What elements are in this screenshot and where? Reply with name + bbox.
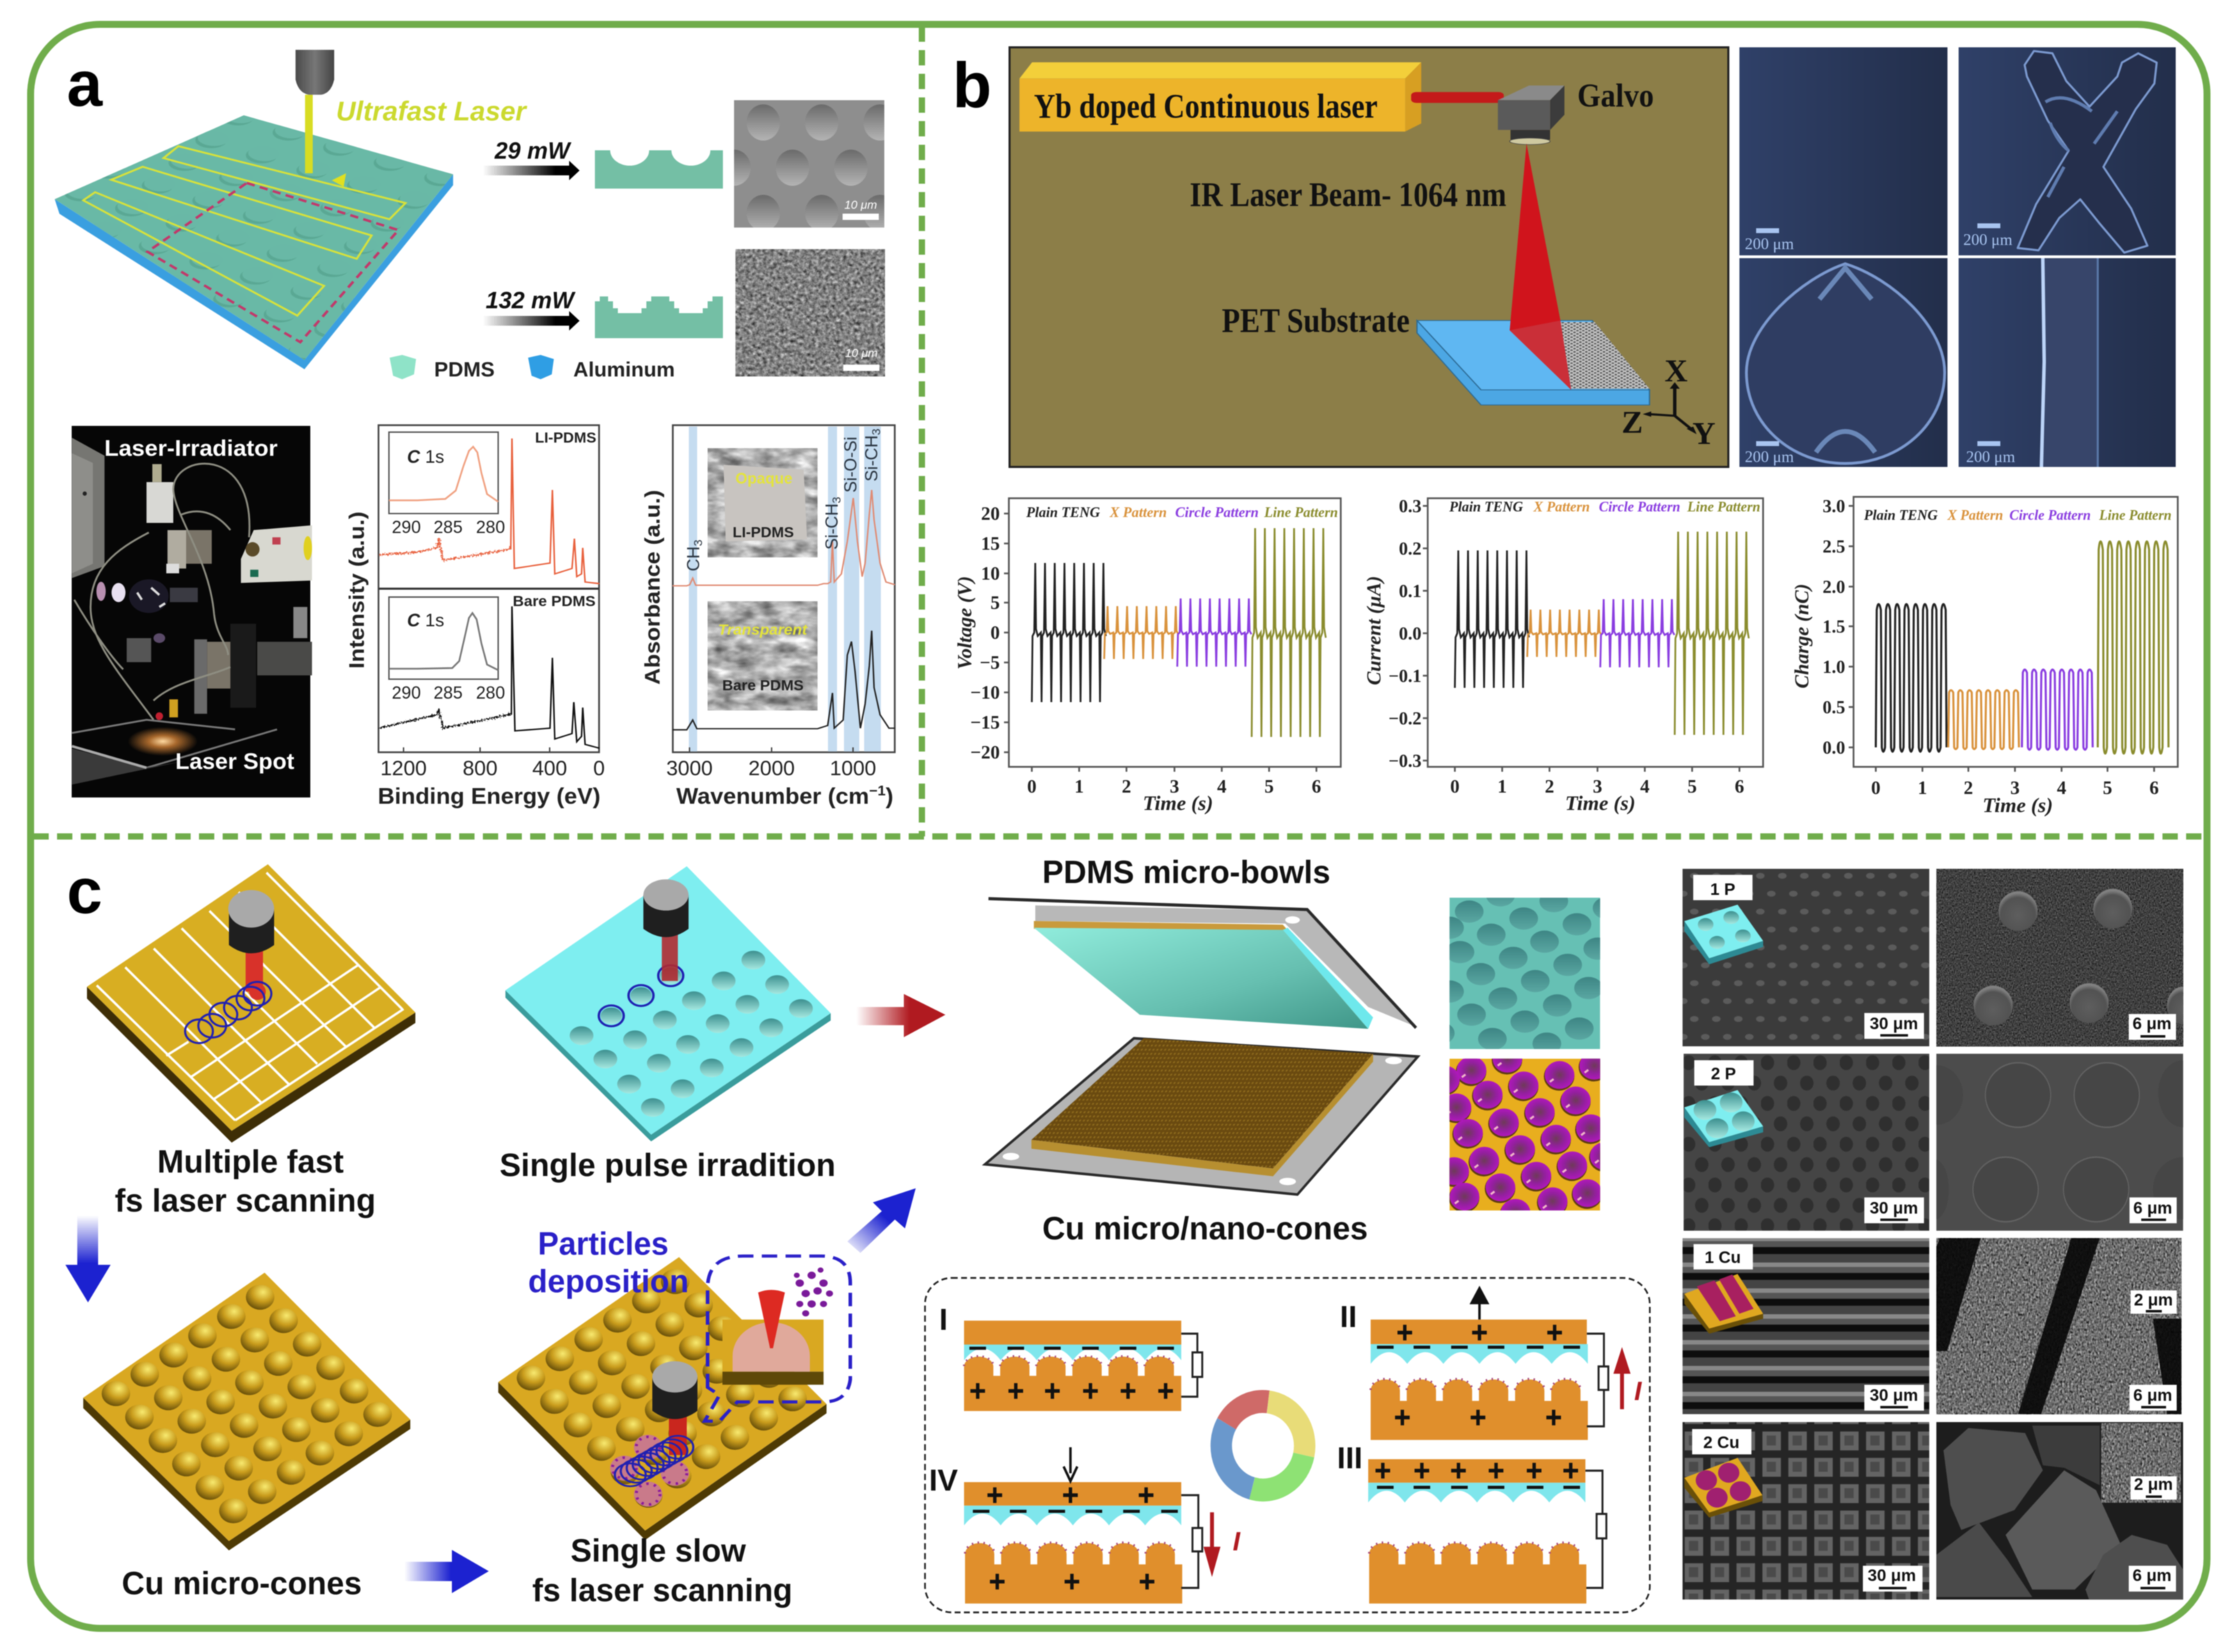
peak labels: CH	[684, 546, 703, 571]
SEM line pattern: 200 μm	[1966, 448, 2015, 466]
center device and mechanism	[925, 898, 1650, 1612]
stage labels: II	[1340, 1300, 1357, 1334]
charge axis titles: Time (s)	[1982, 794, 2053, 817]
SEM image 132 mW	[735, 249, 885, 376]
SEM line pattern	[1959, 258, 2176, 467]
setup labels	[1034, 77, 1716, 451]
current labels: I	[1233, 1527, 1241, 1557]
caption: Cu micro-cones: Cu micro-cones	[122, 1565, 362, 1601]
SEM image 29 mW: 10 μm	[844, 198, 877, 212]
current legend: X Pattern	[1533, 498, 1590, 515]
voltage y ticks: −15	[971, 712, 1000, 733]
SEM scale labels: 2 μm	[2134, 1475, 2173, 1494]
charge x ticks	[1871, 777, 2159, 798]
red laser beam	[1510, 143, 1571, 390]
setup labels: Z	[1622, 404, 1643, 440]
inset tick labels: 280	[476, 683, 505, 703]
chart: voltage: Voltage (V)	[954, 576, 976, 669]
charge x ticks: 5	[2103, 777, 2112, 798]
caption: single pulse: Single pulse irradition	[500, 1147, 836, 1183]
charge y ticks: 1.5	[1823, 617, 1845, 637]
SEM white label boxes	[1692, 875, 2176, 1591]
bare PDMS spectrum	[379, 709, 511, 728]
chart: XPS spectra: C 1s	[407, 610, 444, 630]
laser objective	[296, 50, 334, 95]
setup labels: Galvo	[1577, 77, 1654, 114]
current legend	[1449, 498, 1760, 515]
SEM scale labels: 30 μm	[1870, 1386, 1918, 1405]
yellow scan path	[83, 146, 406, 316]
charge x ticks: 6	[2149, 777, 2159, 798]
image: Cu cones	[1449, 1058, 1601, 1212]
SEM plain	[1739, 47, 1947, 255]
chart: charge: Charge (nC)	[1791, 584, 1813, 688]
setup labels: X	[1664, 353, 1688, 388]
yellow direction arrow	[332, 173, 346, 186]
SEM 2Cu	[1682, 1422, 2183, 1600]
stage labels	[929, 1300, 1362, 1498]
plate: Cu micro-cones	[83, 1273, 411, 1550]
setup labels: Yb doped Continuous laser	[1034, 86, 1378, 125]
magnified inset	[705, 1256, 850, 1421]
x axis title: Binding Energy (eV)	[378, 784, 600, 809]
SEM tags: 1 P	[1710, 880, 1735, 899]
SEM X pattern	[1959, 47, 2176, 255]
chart: XPS spectra: Bare PDMS	[513, 594, 596, 610]
SEM 1P	[1682, 869, 2199, 1047]
SEM plain: 200 μm	[1745, 235, 1794, 253]
panel: a	[55, 49, 895, 809]
caption: fs laser scanning 2: fs laser scanning	[532, 1572, 792, 1608]
heading: Cu micro/nano-cones: Cu micro/nano-cones	[1042, 1210, 1368, 1246]
setup labels: Y	[1692, 415, 1716, 451]
voltage y ticks: −5	[980, 652, 1000, 673]
inset tick labels	[392, 518, 505, 703]
charge y ticks: 3.0	[1823, 496, 1845, 516]
caption: particles: Particles	[538, 1225, 669, 1262]
stage labels: IV	[929, 1463, 958, 1498]
setup labels: IR Laser Beam- 1064 nm	[1190, 175, 1506, 214]
inset photo: opaque	[708, 448, 818, 557]
charge legend: Line Pattern	[2098, 507, 2172, 523]
panel label b: b	[953, 50, 991, 121]
SEM X pattern: 200 μm	[1963, 231, 2012, 248]
voltage x ticks: 3	[1170, 776, 1179, 797]
charge legend: X Pattern	[1947, 507, 2003, 523]
LI-PDMS spectrum	[379, 539, 511, 560]
arrow 29 mW	[483, 161, 580, 180]
current legend: Circle Pattern	[1599, 498, 1680, 515]
heading: PDMS micro-bowls: PDMS micro-bowls	[1042, 854, 1330, 890]
y axis title: Absorbance (a.u.)	[640, 490, 664, 685]
charge traces	[1876, 541, 2169, 754]
chart: XPS spectra: C 1s	[407, 446, 444, 467]
blue down arrow	[65, 1216, 111, 1303]
FTIR LI-PDMS curve	[673, 490, 895, 586]
x axis title: Wavenumber (cm	[676, 784, 861, 809]
peak labels: Si-CH	[822, 503, 842, 550]
current y ticks: 0.1	[1399, 581, 1421, 601]
stage I	[964, 1321, 1202, 1411]
peak labels	[684, 429, 883, 571]
panel label a: a	[67, 49, 103, 120]
stage III	[1368, 1459, 1607, 1603]
chart: XPS spectra	[344, 425, 605, 809]
SEM images blue	[1739, 47, 2176, 467]
SEM scale labels: 6 μm	[2133, 1015, 2172, 1033]
charge y ticks: 2.5	[1823, 537, 1845, 557]
yellow laser beam	[305, 95, 313, 173]
inset photo: transparent: Bare PDMS	[722, 678, 804, 694]
current x ticks: 2	[1545, 776, 1554, 797]
voltage legend: Plain TENG	[1026, 504, 1100, 521]
plate: single pulse	[505, 866, 831, 1141]
current legend: Plain TENG	[1449, 498, 1523, 515]
SEM scale bars	[1879, 1035, 2166, 1588]
charge x ticks: 2	[1963, 777, 1973, 798]
charge legend: Circle Pattern	[2009, 507, 2091, 523]
panel: b	[953, 47, 2178, 817]
inset tick labels: 285	[433, 683, 463, 703]
charge x ticks: 3	[2010, 777, 2020, 798]
current x ticks: 6	[1735, 776, 1744, 797]
current x ticks: 1	[1497, 776, 1507, 797]
red beam tube	[1411, 92, 1504, 103]
image: PDMS bowls	[1449, 897, 1601, 1049]
caption: fs laser scanning: fs laser scanning	[115, 1182, 376, 1218]
SEM circle pattern: 200 μm	[1745, 448, 1794, 466]
voltage y ticks: 15	[981, 533, 1000, 554]
deposited spheres	[610, 1435, 689, 1507]
voltage legend: Circle Pattern	[1175, 504, 1259, 521]
SEM 1Cu	[1682, 1238, 2181, 1414]
x axis: 800	[463, 757, 497, 780]
SEM image 29 mW	[727, 93, 891, 232]
x axis	[381, 757, 605, 780]
mechanism dashed box	[925, 1278, 1650, 1612]
current labels: I	[1634, 1377, 1643, 1406]
SEM tags: 2 Cu	[1703, 1433, 1739, 1452]
current y ticks: 0.3	[1399, 496, 1421, 516]
cycle ring	[1221, 1401, 1305, 1490]
SEM scale labels: 2 μm	[2134, 1291, 2173, 1310]
charge x ticks: 4	[2057, 777, 2066, 798]
current legend: Line Pattern	[1687, 498, 1760, 515]
section: rough bowls	[595, 296, 723, 338]
current y ticks: −0.1	[1389, 666, 1421, 686]
inset photo: transparent: Transparent	[718, 622, 808, 638]
peak labels: 3	[870, 429, 883, 435]
current arrow up	[1616, 1353, 1628, 1409]
SEM circle pattern	[1739, 258, 1947, 467]
SEM image 132 mW: 10 μm	[845, 347, 878, 360]
SEM scale labels: 6 μm	[2133, 1566, 2172, 1585]
charge y ticks	[1823, 496, 1845, 758]
x axis: 0	[593, 757, 605, 780]
132 mW label: 132 mW	[486, 287, 576, 314]
legend	[390, 355, 675, 381]
laser plate schematic	[55, 50, 453, 370]
x axis	[667, 757, 876, 780]
current y ticks	[1389, 496, 1421, 771]
peak labels: Si-O-Si	[841, 436, 861, 493]
laser setup schematic	[1010, 47, 1728, 467]
voltage x ticks: 1	[1074, 776, 1084, 797]
SEM scale labels: 30 μm	[1867, 1566, 1916, 1585]
caption: single slow: Single slow	[571, 1532, 746, 1568]
lower inset	[389, 597, 498, 679]
chart: voltage	[954, 498, 1341, 815]
charge legend	[1863, 507, 2172, 523]
SEM scale labels: 6 μm	[2133, 1386, 2172, 1405]
current x ticks: 0	[1450, 776, 1460, 797]
peak labels: Si-CH	[862, 435, 882, 482]
voltage legend: X Pattern	[1109, 504, 1167, 521]
galvo	[1498, 86, 1564, 100]
chart: current	[1363, 496, 1763, 815]
photo: laser irradiator	[72, 426, 312, 797]
chart: FTIR spectra	[640, 425, 895, 809]
blue right arrow	[404, 1550, 488, 1593]
photo: laser irradiator: Laser Spot	[175, 749, 294, 774]
plate: particles deposition	[498, 1256, 850, 1540]
inset tick labels: 290	[392, 683, 421, 703]
SEM scale labels	[1867, 1015, 2173, 1585]
current x ticks: 4	[1640, 776, 1650, 797]
stage II	[1371, 1288, 1628, 1440]
inset photo: transparent	[708, 601, 818, 710]
charge y ticks: 0.5	[1823, 697, 1845, 717]
x axis title: )	[886, 784, 893, 809]
current y ticks: 0.2	[1399, 539, 1421, 559]
stage labels: III	[1337, 1441, 1362, 1475]
FTIR bare PDMS curve	[673, 630, 895, 730]
motion arrow up	[1472, 1288, 1488, 1319]
current x ticks: 5	[1687, 776, 1697, 797]
peak labels: 3	[692, 539, 705, 546]
current x ticks: 3	[1593, 776, 1602, 797]
SEM tags	[1703, 880, 1741, 1452]
voltage legend: Line Pattern	[1264, 504, 1338, 521]
voltage traces	[1032, 528, 1326, 737]
setup labels: PET Substrate	[1222, 301, 1410, 340]
inset tick labels: 290	[392, 518, 421, 537]
panel label c: c	[67, 856, 102, 927]
charge x ticks: 0	[1871, 777, 1881, 798]
x axis: 2000	[749, 757, 795, 780]
inset photo: opaque: Opaque	[735, 470, 792, 487]
legend: PDMS	[434, 358, 495, 381]
current arrow down	[1206, 1512, 1218, 1570]
SEM grid	[1682, 869, 2199, 1600]
stage IV	[964, 1447, 1218, 1603]
plate: multiple fast scanning	[87, 864, 415, 1143]
panel: c	[65, 854, 2199, 1612]
voltage x ticks: 6	[1312, 776, 1321, 797]
stage labels: I	[939, 1303, 948, 1337]
voltage y ticks	[971, 503, 1000, 763]
current axis titles: Time (s)	[1565, 792, 1636, 815]
voltage legend	[1026, 504, 1338, 521]
blue diagonal arrow	[847, 1189, 916, 1253]
voltage x ticks	[1027, 776, 1321, 797]
voltage y ticks: −10	[971, 682, 1000, 703]
axes	[1650, 387, 1691, 429]
left fabrication schematics	[65, 866, 946, 1593]
29 mW label: 29 mW	[494, 138, 572, 164]
charge y ticks: 2.0	[1823, 577, 1845, 597]
caption: multiple fast: Multiple fast	[157, 1143, 344, 1180]
chart: current: Current (μA)	[1363, 575, 1385, 685]
voltage axis titles: Time (s)	[1142, 792, 1213, 815]
SEM tags: 2 P	[1711, 1065, 1736, 1083]
charge y ticks: 1.0	[1823, 657, 1845, 677]
caption: deposition: deposition	[528, 1263, 689, 1299]
voltage y ticks: 5	[991, 592, 1000, 613]
device: upper PDMS plate	[989, 898, 1416, 1029]
SEM scale labels: 30 μm	[1870, 1199, 1918, 1218]
voltage y ticks: −20	[971, 742, 1000, 763]
current x ticks	[1450, 776, 1744, 797]
inset tick labels: 280	[476, 518, 505, 537]
device: lower Cu plate	[985, 1038, 1418, 1195]
charge y ticks: 0.0	[1823, 738, 1845, 758]
red right arrow	[856, 994, 946, 1037]
SEM scale labels: 6 μm	[2133, 1199, 2172, 1218]
voltage x ticks: 5	[1264, 776, 1274, 797]
chart: charge	[1791, 496, 2178, 817]
section: smooth bowls	[595, 150, 723, 189]
voltage x ticks: 0	[1027, 776, 1037, 797]
voltage y ticks: 10	[981, 563, 1000, 584]
voltage x ticks: 4	[1217, 776, 1227, 797]
motion arrow down	[1064, 1447, 1077, 1481]
charge legend: Plain TENG	[1863, 507, 1938, 523]
x axis: 1000	[830, 757, 876, 780]
voltage y ticks: 20	[981, 503, 1000, 524]
current traces	[1455, 532, 1749, 735]
red dashed area	[148, 183, 399, 342]
voltage y ticks: 0	[991, 622, 1000, 643]
current labels	[1233, 1377, 1643, 1557]
ultrafast laser label: Ultrafast Laser	[336, 97, 527, 127]
charge x ticks: 1	[1918, 777, 1927, 798]
arrow 132 mW	[483, 311, 580, 331]
series labels: LI-PDMS	[535, 430, 596, 446]
inset tick labels: 285	[433, 518, 463, 537]
laser source box	[1019, 62, 1421, 79]
SEM scale labels: 30 μm	[1870, 1015, 1918, 1033]
current y ticks: −0.2	[1389, 708, 1421, 729]
x axis: 400	[532, 757, 567, 780]
current y ticks: −0.3	[1389, 751, 1421, 771]
x axis: 1200	[381, 757, 427, 780]
voltage x ticks: 2	[1122, 776, 1131, 797]
PET substrate	[1417, 321, 1650, 405]
SEM tags: 1 Cu	[1705, 1248, 1741, 1267]
x axis: 3000	[667, 757, 712, 780]
current y ticks: 0.0	[1399, 624, 1421, 644]
y axis title: Intensity (a.u.)	[344, 511, 369, 669]
upper inset	[389, 432, 498, 514]
SEM 2P	[1684, 1054, 2183, 1231]
legend: Aluminum	[573, 358, 675, 381]
inset photo: opaque: LI-PDMS	[733, 525, 794, 541]
peak labels: 3	[830, 497, 843, 503]
photo labels: Laser-Irradiator	[104, 436, 278, 461]
x axis title: −1	[869, 784, 886, 799]
